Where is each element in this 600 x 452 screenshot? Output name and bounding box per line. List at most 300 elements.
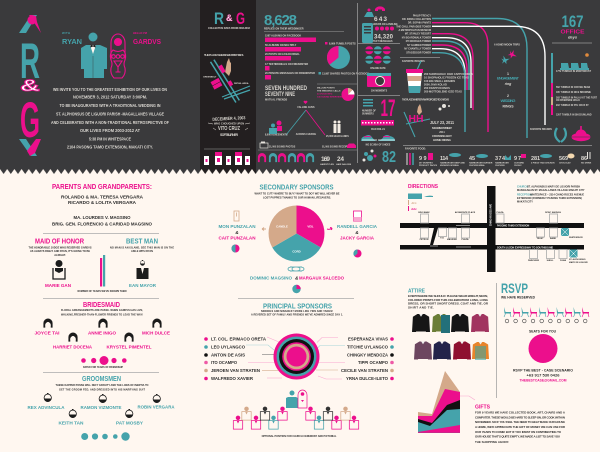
bar chart: 1587 ALBUMS ON FACEBOOK xyxy=(265,34,301,38)
groomsmen names: KEITH TAN xyxy=(58,420,84,426)
dark header band xyxy=(0,0,600,170)
pie chart: calls: THE WEDDING CALLS xyxy=(317,90,341,92)
concentric rings chart xyxy=(274,334,320,380)
map: CHINO ROCES AVE xyxy=(490,204,492,226)
engagement ring: 1 xyxy=(507,72,509,76)
gifts text xyxy=(460,396,566,444)
gifts text: OUR HOUSE THAT'S QUITE EMPTY, WE MADE A LIST TO SAVE YOU xyxy=(475,434,560,438)
section: bridesmaid: FLORAL ARRANGEMENTS ARE PASSE. WHEN GARDVS HAS LIVE, xyxy=(61,309,143,312)
heading: office days xyxy=(560,12,585,40)
icon: people xyxy=(334,120,340,133)
section: secondary sponsors: SECONDARY SPONSORS xyxy=(260,184,334,192)
route labels: NY BOARDWALK TOWER xyxy=(402,37,431,40)
wedding rings: WEDDING xyxy=(500,98,516,103)
map: PLAZA xyxy=(497,211,504,214)
section: parents and grandparents: ROLANDO & MA. TERESA VERGARA xyxy=(61,194,144,200)
church arrangement: OPTIONAL POSITION FOR CHURCH CEREMONY AND PICTORIAL xyxy=(262,435,337,438)
timeline bar: 902 TUMBLR IN 5TH CRUZ ST xyxy=(556,105,589,107)
map: MARY DE LIGUORI xyxy=(569,261,588,264)
mutual friends: MUTUAL FRIENDS xyxy=(265,98,288,102)
small pie xyxy=(232,244,240,252)
gifts text: A HOME, WE'D APPRECIATE THE GIFT OF MONEY WE CAN USE FOR xyxy=(475,425,566,429)
sponsors right: & xyxy=(355,230,359,235)
connector lines xyxy=(246,337,345,379)
route labels: DR. SOPHIA PAINTS xyxy=(408,22,431,25)
bar chart: 50 ALBUMS ON MULTIPLY xyxy=(265,44,297,47)
sound row xyxy=(260,142,356,148)
food row: CHOUX xyxy=(514,165,522,167)
gifts text: THE SHOPPING AGONY. xyxy=(475,440,509,444)
food row: MUSHROOM MEAL xyxy=(440,164,460,167)
sponsors left: CAIT PUNZALAN xyxy=(218,236,256,240)
icon: camera xyxy=(367,73,391,92)
sponsors left: MON PUNZALAN xyxy=(218,224,256,229)
pie chart: posts: 13,987 SHARED PHOTOS ON FACEBOOK xyxy=(322,72,370,76)
legend: Jiro xyxy=(411,201,417,205)
icon: coffee cup xyxy=(402,60,473,94)
wedding rings: RINGS xyxy=(502,104,514,108)
sponsors list right: YRNA DULCE-ILETO xyxy=(346,376,389,381)
names xyxy=(45,283,157,288)
pie chart: calls: MILLION POINTS xyxy=(317,88,335,90)
section: attire: EVERYWHERE WE SHOULD: PLEASE WEAR BRIGHT, NEON, xyxy=(408,294,488,298)
icon row: hairstyles: HAIRSTYLES xyxy=(320,163,334,166)
dots left xyxy=(204,337,208,380)
couple names: & xyxy=(295,276,299,280)
invitation text: NOVEMBER 3, 2012 SATURDAY 3:00PM. xyxy=(73,94,147,100)
invitation text: AND CELEBRATED WITH A NON-TRADITIONAL RETROSPECTIVE OF xyxy=(51,120,169,125)
timeline bar: 582 TUMBLR IN COFFEE BEAN xyxy=(556,86,591,89)
icon: orb logo xyxy=(572,126,590,141)
icon row: hairstyles xyxy=(258,153,352,166)
bridesmaid names: MICH DULCE xyxy=(142,330,170,336)
map xyxy=(400,186,588,272)
coffee list: 200 FRAPPUCCINOS xyxy=(424,86,450,90)
small pie xyxy=(292,285,301,293)
food row: CUSTARD xyxy=(514,162,525,164)
section: groomsmen: GROOMSMEN xyxy=(82,376,121,383)
gifts text: OUR YEARS TO COME! BUT IF YOU INSIST ON CONTRIBUTING TO xyxy=(475,430,562,434)
sponsors list left xyxy=(211,337,266,381)
section: secondary sponsors: WHAT TO CUT? WHERE TO BUY? WHAT TO DO? WE WILL NEVER BE xyxy=(254,192,340,196)
sponsors list left: WALFREDO XAVIER xyxy=(211,376,254,381)
food row: PRODUCT PACKS xyxy=(419,164,438,167)
wedding rings xyxy=(500,94,516,108)
invitation text: 2104 PASONG TAMO EXTENSION, MAKATI CITY. xyxy=(67,144,153,150)
section: bridesmaid: RATED FOR YEARS OF FRIENDSHIP xyxy=(83,366,124,369)
bar chart: 20 POSTS ON LIVEJOURNAL xyxy=(265,53,300,56)
dots right xyxy=(390,337,394,380)
bride name: HELLO I'M xyxy=(133,31,148,35)
big number 82 xyxy=(362,149,396,166)
triangle diagram: ACROSS CHURCH xyxy=(296,133,317,136)
map: PARKVIEW xyxy=(528,259,539,262)
legend: Adv xyxy=(410,207,417,211)
section: attire: DRESS, OR SHORT SHORT DRESS. COAT AND TIE, OR xyxy=(408,302,489,306)
seat circles xyxy=(505,319,587,323)
section: groomsmen: GET THE GROOM FED, AND DRESSED INTO HIS MARRYING SUIT xyxy=(59,388,145,392)
pie chart: calls: 130 SOUND INTERVIEW xyxy=(317,96,343,98)
section: maid of honor and best man: NO MAN IS AN ISLAND, SEE THIS MAN IS ON THE xyxy=(110,246,174,250)
heading R and G: G xyxy=(236,9,245,28)
invitation text xyxy=(51,87,169,150)
brands xyxy=(530,126,590,142)
icon: mobile and hearts xyxy=(362,23,394,43)
sponsors list right: CECILE VAN STRATEN xyxy=(341,368,388,373)
triangle diagram: FALLING GUSS xyxy=(298,106,315,109)
icon: telephone: 643 xyxy=(374,16,387,23)
sponsors list right: TIPPI OCAMPO xyxy=(358,360,389,365)
big number replies: 8,628 xyxy=(264,12,297,29)
rsvp contact: +63 917 530 0426 xyxy=(526,374,560,378)
small pie xyxy=(353,249,362,258)
triangle diagram xyxy=(265,101,349,138)
section: directions xyxy=(400,184,588,272)
icon: knot xyxy=(288,267,304,271)
triangle diagram: 25,000 HELD HANDS xyxy=(326,135,349,138)
couple names: MARGAUX SALCEDO xyxy=(299,276,344,280)
date text: CROSSING BOY xyxy=(432,134,452,138)
section: attire: ATTIRE xyxy=(408,288,426,294)
rsvp contact xyxy=(513,368,573,382)
map: first met: THE PLACE WHERE WE FIRST MET... xyxy=(204,53,244,57)
mutual friends xyxy=(265,86,308,102)
chairs row xyxy=(504,307,589,317)
section: groomsmen: THESE DAPPER POSSE WILL DEFY GRAVITY AND THE LAWS OF INERTIA TO xyxy=(56,384,149,387)
icon: coffee cup: FAVORITE BRANDS xyxy=(402,60,425,63)
icon grid: rolls: ONLINE DATE xyxy=(370,67,386,70)
pie chart: veil cord candle xyxy=(269,206,324,261)
heading R and G: COLLECTIVE DATA FROM 2003-2012 xyxy=(208,26,251,30)
heading: office days: OFFICE xyxy=(560,30,585,36)
section: principal sponsors xyxy=(204,304,394,438)
sponsors list right: TITCHIE UYLANGCO xyxy=(347,345,389,350)
route labels: A METROPOLITAN MUSEUM xyxy=(398,29,431,32)
timeline bar: 392 TUMBLR IN PALAU AT THE FORT xyxy=(556,96,598,100)
shirts xyxy=(412,314,489,360)
icon: shoes: NO SCUBA OF SHOES xyxy=(366,144,391,146)
groom name: W/TH xyxy=(62,31,70,35)
section: bridesmaid: BRIDESMAID xyxy=(83,302,120,309)
map: ALTAMONTE PLACE xyxy=(455,211,476,214)
section: directions: DIRECTIONS xyxy=(408,184,439,190)
gifts text: NOVEMBER. SO IF YOU FEEL THE NEED TO HELP MAKE OUR HOUSE xyxy=(475,420,565,424)
big number 17: SUMMERS xyxy=(362,114,374,116)
section: maid of honor and best man xyxy=(28,236,174,293)
icon: camera: 100 MOMENTS xyxy=(371,90,388,92)
map: BANK xyxy=(550,237,556,240)
heading R and G: & xyxy=(226,13,233,23)
coffee list: 10 SHOPAHOLIC FROZEN ICE TEAS xyxy=(424,76,469,80)
monogram R and G: & xyxy=(20,76,40,95)
rsvp contact: THEBESTCASE@GMAIL.COM xyxy=(520,378,566,382)
route labels: THE CHILL PARADISE TOWER xyxy=(396,25,431,28)
bar chart: 17 TESTIMONIALS ON FRIENDSTER xyxy=(265,63,308,66)
map: 7/11 xyxy=(440,238,445,240)
icon row: hairstyles: 169 xyxy=(321,156,330,163)
dot chart xyxy=(81,356,127,365)
bride name xyxy=(133,31,161,46)
groomsmen names: ROBIN VERGARA xyxy=(138,404,175,410)
food row: 114 xyxy=(440,156,449,162)
icon: mobile and hearts: TEXT MESSAGES xyxy=(373,40,393,43)
section: maid of honor and best man: BEST MAN xyxy=(126,236,158,246)
sponsors list right: ESPERANZA VIVAS xyxy=(348,337,388,342)
section: secondary sponsors: LOST PUPPIES THANKS TO OUR HUMAN LIFESAVERS. xyxy=(263,196,331,200)
wedding rings: 2 xyxy=(507,94,509,98)
mutual friends: SEVENTY NINE xyxy=(265,92,295,98)
icon: groom xyxy=(81,32,107,78)
section: maid of honor and best man: THE HONORABLE JUDGE WHO RESERVED GARDVS xyxy=(28,246,92,250)
icon: bottles xyxy=(204,152,250,165)
gifts text: COMPUTER. THESE WOULD BE HARD TO SLEEP ON, OR COOK WITH IN xyxy=(475,416,565,420)
food row: HAMBURGER BEEF AND xyxy=(440,162,465,164)
gifts text: FOR 9 YEARS WE HAVE COLLECTED BOOK, ART, CHAIRS AND A xyxy=(475,410,566,414)
icon: groomsmen heads xyxy=(44,393,160,418)
dot chart xyxy=(81,432,130,441)
icon: airplanes xyxy=(494,44,520,65)
sponsors list left: LT. COL. EPIMACO ORETA xyxy=(211,337,266,342)
section: rsvp: RSVP xyxy=(501,280,528,296)
section: maid of honor and best man: AS ALWAYS RIGHT. AND RYAN, IT'S GOING TO BE xyxy=(30,250,90,253)
food row: 45 xyxy=(469,156,475,162)
pie chart: calls: 23 VOICE MTG xyxy=(317,94,333,96)
icon: best man xyxy=(136,260,148,279)
names: MARIE GAN xyxy=(45,283,72,288)
section: maid of honor and best man: MAID OF HONOR xyxy=(35,236,84,246)
chart: years known: NUMBER OF YEARS WE'VE KNOWN THEM xyxy=(77,290,127,293)
food row: 374 xyxy=(495,156,506,162)
map: PASONG TAMO EXTENSION xyxy=(497,225,529,228)
sound row: 31,000 SOUND PHOTOS xyxy=(269,146,296,148)
pie chart: veil cord candle: VEIL xyxy=(307,224,314,228)
sponsors list right xyxy=(341,337,389,381)
big number 82: 82 xyxy=(382,149,396,166)
heading R and G: R xyxy=(214,9,224,28)
address text: WHITESPACE – 2314 CHINO ROCES AVENUE xyxy=(530,194,584,196)
map: first met: GREENBELT xyxy=(203,76,217,78)
bridesmaid names: KRYSTEL PIMENTEL xyxy=(106,344,152,350)
invitation text: 5:38 PM IN WHITESPACE xyxy=(89,136,131,142)
icon grid: rolls xyxy=(365,46,391,70)
icon: couple arguing xyxy=(269,120,282,134)
section: parents and grandparents: MA. LOURDES V. MAGSINO xyxy=(74,215,131,220)
food row: HAMBURGER xyxy=(495,162,509,164)
heading R and G xyxy=(208,9,251,30)
section: parents and grandparents: RICARDO & LOLITA VERGARA xyxy=(68,200,137,205)
section: rsvp xyxy=(501,280,589,382)
timeline bar: 185 TUMBLR IN NICE BROWNIE xyxy=(556,92,591,94)
food row: 2 PIECE THAI CHICKEN xyxy=(531,162,555,164)
sponsors left: & xyxy=(235,230,239,235)
groomsmen names: REX ADVINCULA xyxy=(28,405,65,410)
address text: MAKATI CITY xyxy=(517,200,533,204)
address text: RECEPTION: xyxy=(517,194,533,196)
bar chart: 20 PRIVATE MESSAGES ON FRIENDSTER xyxy=(265,72,315,75)
sponsors list left: ITO OCAMPO xyxy=(211,360,238,365)
section: maid of honor and best man: ALRIGHT. xyxy=(54,254,66,257)
bar chart xyxy=(265,34,316,80)
map: proposal: THE PLACE WHERE RYAN PROPOSED TO GARDVS xyxy=(402,98,449,102)
timeline bar: 1772 TUMBLR IN MONTCRUST xyxy=(556,70,592,73)
icon: chairs xyxy=(560,63,589,70)
icon: bridesmaid heads xyxy=(43,318,162,342)
food row: 86 xyxy=(581,156,587,162)
date text: JULY 23, 2011 xyxy=(430,120,454,125)
icon: telephone xyxy=(364,6,398,26)
icon: shoes xyxy=(361,135,395,146)
triangle diagram: 8,000 AGREEMENTS xyxy=(265,134,288,136)
food row: 97 xyxy=(514,156,521,162)
coffee list xyxy=(424,72,473,94)
pie chart: veil cord candle: CORD xyxy=(292,250,301,254)
route labels xyxy=(396,14,432,55)
icon: bride xyxy=(110,34,126,78)
heading: office days: days xyxy=(568,34,578,40)
section: rsvp: WE HAVE RESERVED xyxy=(501,296,535,300)
groomsmen names: RAMON VIZMONTE xyxy=(80,405,122,410)
chart: years known xyxy=(77,255,127,293)
coffee list: 100 BIG SMALL BRANDS xyxy=(424,79,455,83)
map: RCBC SAVINGS xyxy=(545,211,562,214)
mutual friends: SEVEN HUNDRED xyxy=(265,86,308,92)
map: BDO BANK xyxy=(418,211,430,214)
stamp: venue date: SOFT BURNER xyxy=(220,133,238,137)
address text: CHURCH: xyxy=(517,186,529,188)
date text xyxy=(430,120,454,142)
map: ST. ALPHONSUS xyxy=(569,258,586,261)
section: attire: SHIRT AND TIE. xyxy=(408,306,434,310)
food row xyxy=(405,148,592,167)
route labels: NY GARDEN TOWER xyxy=(407,44,431,47)
section: parents and grandparents xyxy=(52,184,153,226)
sponsors right: RANDELL GARCIA xyxy=(337,224,378,229)
sponsors right xyxy=(327,211,378,258)
food row: NO DRINK xyxy=(581,162,592,164)
section: principal sponsors: NINONGS AND NINANGS? MORE LIKE YINS AND YANGS! xyxy=(261,310,333,313)
panel: favorites xyxy=(396,12,598,167)
bridesmaid names xyxy=(34,330,170,350)
groom name: RYAN xyxy=(62,37,82,46)
couple names xyxy=(250,276,344,280)
stamp: venue date xyxy=(208,115,250,137)
engagement ring xyxy=(497,72,520,86)
big number replies: REPLIES ON THEIR WEDDINGER xyxy=(264,28,304,30)
sponsors left xyxy=(218,211,266,252)
gifts text: GIFTS xyxy=(475,404,491,410)
timeline bar xyxy=(551,53,598,116)
heading: office days: 167 xyxy=(562,12,584,31)
pie chart: calls xyxy=(317,88,354,101)
date text: MAGSINO STREET xyxy=(432,126,452,130)
names: EAN MAYOR xyxy=(129,283,157,288)
food row: CHOCOLAT xyxy=(559,162,571,164)
section: secondary sponsors xyxy=(218,184,378,293)
coffee list: 200 MOTTOBLEND ICED TEAS xyxy=(424,90,462,94)
groomsmen names xyxy=(28,404,175,426)
bridesmaid names: ANNIE INIGO xyxy=(88,330,116,336)
map: proposal xyxy=(402,98,454,142)
section: maid of honor and best man: AISLE WITH RYAN xyxy=(131,250,153,253)
route labels: MT. STANLEY RESORT xyxy=(405,33,432,36)
church arrangement xyxy=(233,390,359,438)
icon: telephone: HOURS ON LANDLINE xyxy=(373,23,398,26)
panel: communication stats xyxy=(358,6,400,166)
invitation text: WE INVITE YOU TO THE GREATEST EXHIBITION OF OUR LIVES ON xyxy=(53,87,167,92)
section: groomsmen xyxy=(28,376,175,441)
groom name xyxy=(62,31,82,46)
food row: DIY MOMFIES xyxy=(419,162,433,164)
food row: FAVORITE FOOD: xyxy=(405,148,426,150)
icon: mobile and hearts: 34,320 xyxy=(374,34,394,40)
area chart: gifts xyxy=(418,371,460,433)
timeline bar: 1207 TUMBLR IN SHOGUNLAND xyxy=(556,114,592,116)
route labels: NY NOODLES TOWER xyxy=(406,40,431,43)
legend xyxy=(408,194,433,211)
engagement ring: ring xyxy=(505,82,512,86)
map: TRUST xyxy=(537,238,544,240)
pie chart: posts xyxy=(318,42,370,76)
sponsors right: JACKY GARCIA xyxy=(340,236,375,240)
panel: collected data xyxy=(203,9,251,165)
timeline bar: ON RIVERSIDE WALK xyxy=(556,99,580,102)
map: MAGSINO xyxy=(447,238,457,241)
map: proposal: HH xyxy=(408,114,424,125)
section: parents and grandparents: PARENTS AND GRANDPARENTS: xyxy=(52,184,152,191)
map: ZUMA xyxy=(560,259,566,262)
chart: route lines xyxy=(432,18,545,138)
coffee list: 200 SHOPAHOLIC ICED CAPPUCCINOS xyxy=(424,72,473,76)
strip: film rolls: FILM ROLLS xyxy=(371,129,385,131)
monogram R and G xyxy=(19,15,41,156)
section: principal sponsors: A REVERED SET OF FAMILY AND FRIENDS WE'VE ADMIRED SINCE DAY 1. xyxy=(251,314,343,316)
section: attire: COLORED PRINTS FOR THIS CELEBRATION! LONG, LONG xyxy=(408,298,489,302)
pie chart: posts: 8,986 TUMBLR POSTS xyxy=(329,42,356,46)
engagement ring: ENGAGEMENT xyxy=(497,76,520,80)
food row: HAMBURGER BURGER xyxy=(469,162,493,164)
food row: 281 xyxy=(531,156,540,162)
map: SOUTH LUZON EXPRESSWAY TO SOUTHBOUND xyxy=(497,246,553,250)
food row: CHICKEN MEAL xyxy=(469,164,486,167)
route labels: DR. KRIZIA COLLECTION xyxy=(402,18,431,21)
section: principal sponsors: PRINCIPAL SPONSORS xyxy=(263,304,332,310)
sponsors list left: JEROEN VAN STRATEN xyxy=(211,368,260,373)
couple names: DOMINIC MAGSINO xyxy=(250,276,292,280)
map: first met xyxy=(203,53,250,103)
pie chart: veil cord candle: CANDLE xyxy=(276,224,288,228)
big number 17 xyxy=(362,95,396,122)
icon row: hairstyles: 24 xyxy=(337,156,344,163)
big seat circle xyxy=(528,334,558,363)
section: bridesmaid: WALKING,FRESHER-THAN-FLOWER FRIENDS TO LEAD THE WAY! xyxy=(61,314,143,316)
sound row: 51,000 SOUND RECEIPTS xyxy=(322,146,351,148)
coffee list: 2000 JAVA KOLAD xyxy=(424,82,447,86)
route labels: NY CHANTILLY TOWER xyxy=(404,48,431,51)
section: bridesmaid xyxy=(34,302,170,369)
invitation text: TO BE INAUGURATED WITH A TRADITIONAL WEDDING IN xyxy=(60,103,160,108)
bridesmaid names: JOYCE TAI xyxy=(34,330,60,336)
route labels: PHILIP TREACY xyxy=(413,14,431,18)
sponsors list right: CHINGKY MENDOZA xyxy=(347,353,388,358)
map: SHELL xyxy=(547,260,554,262)
icon row: hairstyles: HAIR SALONS xyxy=(336,163,352,166)
invitation text: OUR LIVES FROM 2003-2012 AT xyxy=(80,128,140,133)
sponsors list left: LEO UYLANGCO xyxy=(211,345,246,350)
stamp: venue date: DECEMBER 4, 2003 xyxy=(212,115,246,122)
section: attire xyxy=(408,288,489,360)
big number 17: NUMBER OF xyxy=(362,110,377,112)
section: parents and grandparents: BRIG. GEN. FLORENCIO & CARIDAD MAGSINO xyxy=(52,222,153,226)
